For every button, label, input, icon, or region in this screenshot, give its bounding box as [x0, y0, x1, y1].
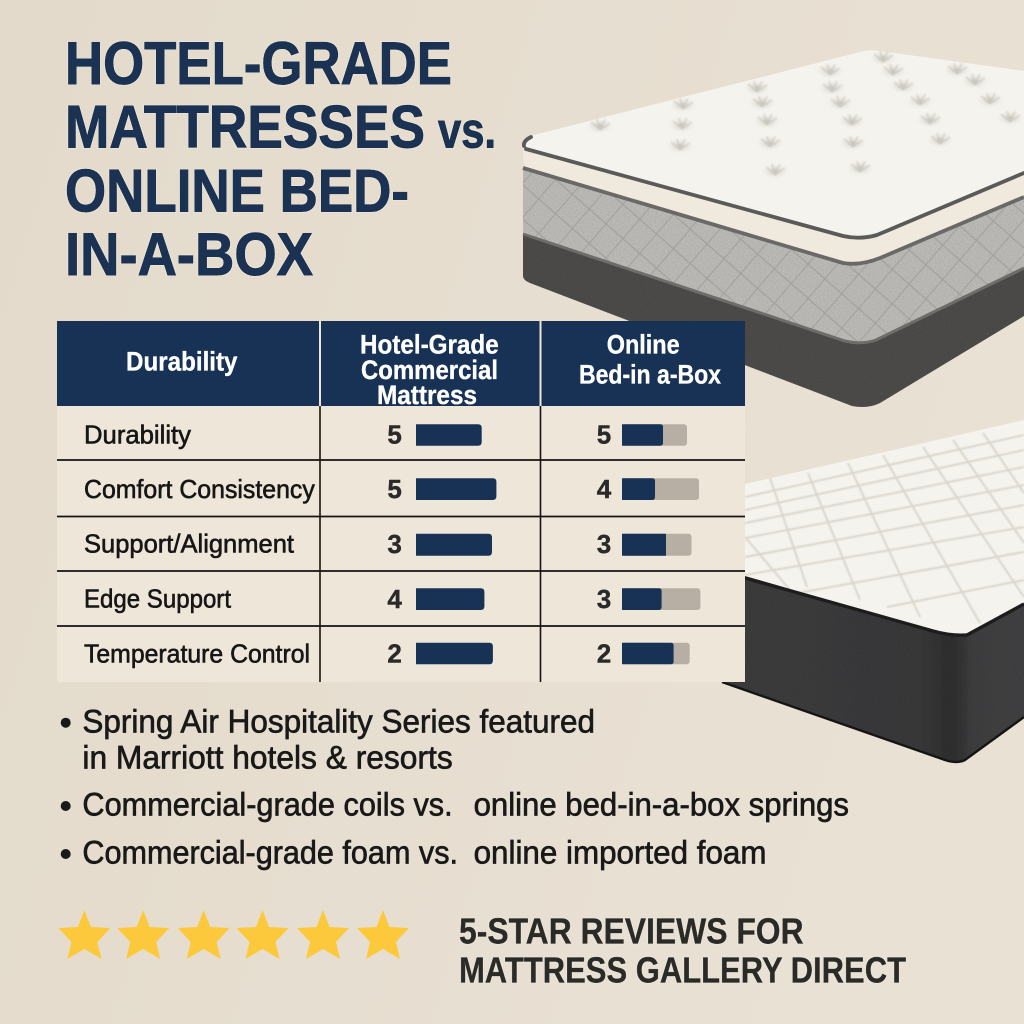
table header: Mattress	[377, 380, 477, 410]
table header: Online	[607, 329, 680, 359]
row: temperature control: Temperature Control	[84, 639, 310, 669]
bullet: coils	[61, 787, 849, 823]
table header	[57, 321, 745, 410]
row: comfort consistency: 4	[597, 474, 612, 504]
icon: six gold stars	[58, 910, 409, 959]
row: edge support	[84, 584, 700, 614]
row: comfort consistency: 5	[387, 474, 402, 504]
row: durability: 5	[597, 420, 611, 450]
reviews text: MATTRESS GALLERY DIRECT	[459, 950, 906, 991]
row: durability: Durability	[84, 419, 191, 449]
row: temperature control	[84, 638, 690, 669]
row: edge support: Edge Support	[84, 584, 232, 614]
bullet: hospitality series: Spring Air Hospitality Series featured	[82, 703, 595, 739]
row: temperature control: 2	[597, 638, 611, 668]
image: pillow-top hotel mattress on base	[523, 50, 1024, 407]
table header: Commercial	[361, 355, 498, 385]
table header: Bed-in a-Box	[579, 359, 721, 389]
title: IN-A-BOX	[65, 221, 313, 288]
bullet: hospitality series: in Marriott hotels & resorts	[82, 739, 453, 775]
row: support/alignment: 3	[597, 529, 611, 559]
bullet: coils: online bed-in-a-box springs	[474, 787, 849, 823]
bullet: foam	[61, 834, 766, 870]
row: support/alignment: Support/Alignment	[84, 529, 295, 559]
image: quilted bed-in-a-box mattress	[700, 420, 1024, 762]
table header: Hotel-Grade	[360, 329, 499, 359]
comparison table	[57, 321, 745, 682]
row: edge support: 4	[387, 584, 402, 614]
reviews text: 5-STAR REVIEWS FOR	[459, 910, 804, 951]
row: support/alignment: 3	[387, 529, 402, 559]
bullet: coils: Commercial-grade coils vs.	[82, 787, 453, 823]
row: durability	[84, 419, 687, 450]
bullet list	[61, 703, 849, 870]
reviews text	[459, 910, 906, 991]
row: support/alignment	[84, 529, 692, 559]
row: durability: 5	[387, 420, 402, 450]
title: vs.	[438, 103, 496, 159]
table header: Durability	[126, 347, 238, 377]
title: ONLINE BED-	[65, 158, 409, 225]
row: edge support: 3	[597, 584, 611, 614]
bullet: hospitality series	[61, 703, 595, 775]
title: MATTRESSES	[65, 94, 425, 161]
row: comfort consistency: Comfort Consistency	[84, 474, 315, 504]
bullet: foam: online imported foam	[474, 834, 766, 870]
title: HOTEL-GRADE	[65, 30, 452, 97]
title	[65, 30, 496, 288]
bullet: foam: Commercial-grade foam vs.	[82, 834, 458, 870]
row: comfort consistency	[84, 474, 699, 504]
row: temperature control: 2	[387, 638, 402, 668]
